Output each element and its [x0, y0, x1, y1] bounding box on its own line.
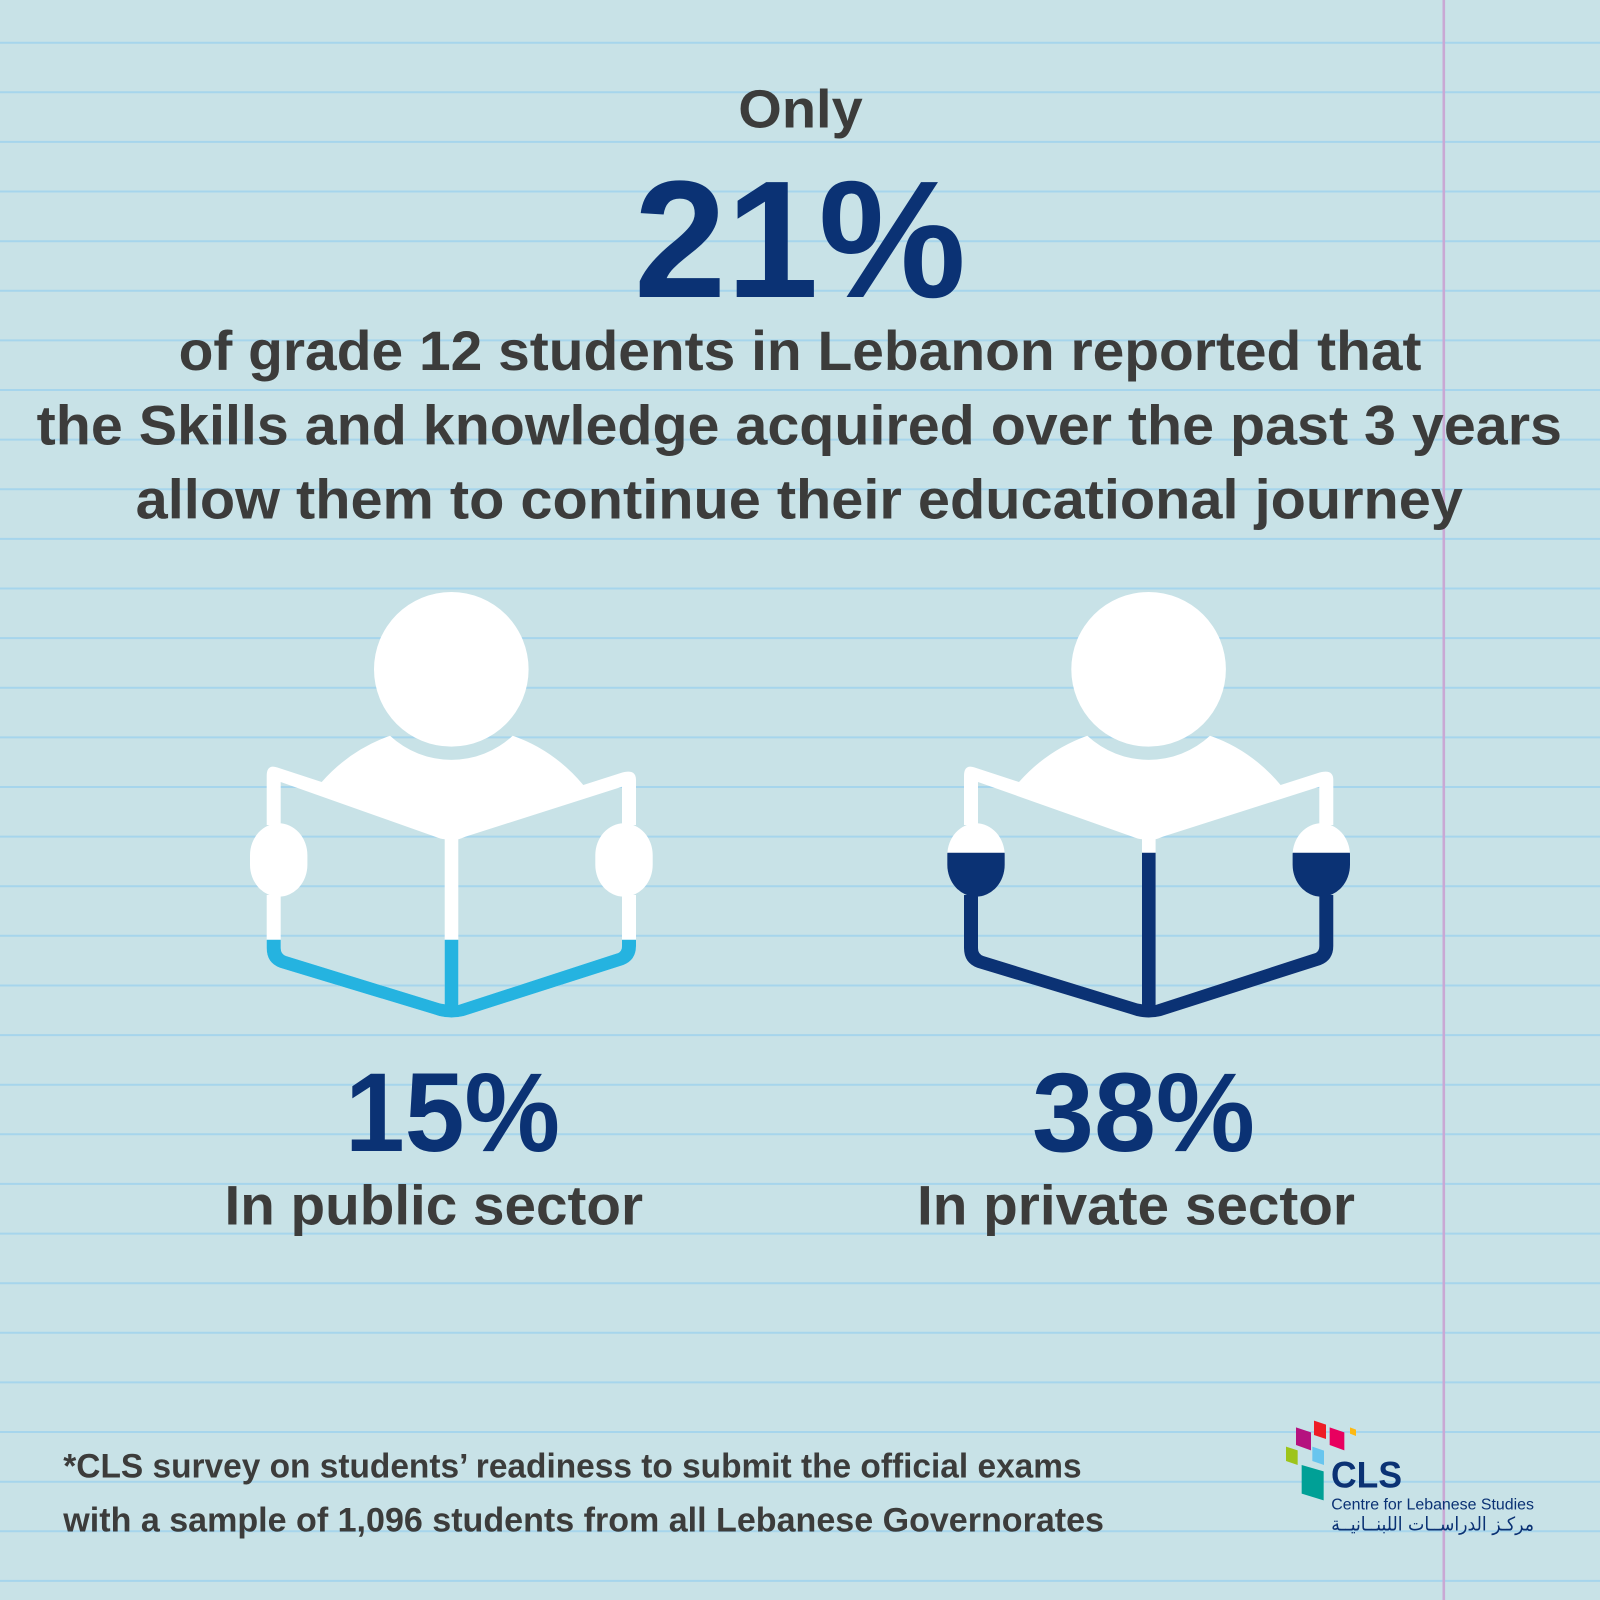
- logo name: English: Centre for Lebanese Studies: [1331, 1496, 1534, 1513]
- statement text: the Skills and knowledge acquired over the past 3 years: [37, 394, 1562, 456]
- footnote: *CLS survey on students’ readiness to submit the official exams: [63, 1448, 1082, 1486]
- statement text: [37, 319, 1562, 530]
- headline statistic: 21%: 21%: [634, 147, 966, 333]
- logo name: Arabic: مركـز الدراســات اللبنــانيــة: [1331, 1514, 1534, 1536]
- footnote: with a sample of 1,096 students from all Lebanese Governorates: [62, 1502, 1104, 1540]
- logo wordmark: CLS: CLS: [1331, 1454, 1402, 1495]
- heading: Only: Only: [738, 80, 863, 140]
- footnote: [62, 1448, 1104, 1540]
- logo: Centre for Lebanese Studies: [1286, 1421, 1534, 1536]
- label: In public sector: In public sector: [224, 1174, 643, 1236]
- statistic: public sector 15%: 15%: [345, 1050, 560, 1175]
- statistic: private sector 38%: 38%: [1032, 1050, 1255, 1175]
- logo mark: coloured tiles: [1286, 1421, 1356, 1500]
- icon: student reading, public sector 15%: [250, 592, 653, 1018]
- icon: student reading, private sector 38%: [947, 592, 1350, 1018]
- statement text: allow them to continue their educational journey: [136, 468, 1463, 530]
- statement text: of grade 12 students in Lebanon reported that: [179, 319, 1422, 382]
- label: In private sector: In private sector: [917, 1174, 1355, 1236]
